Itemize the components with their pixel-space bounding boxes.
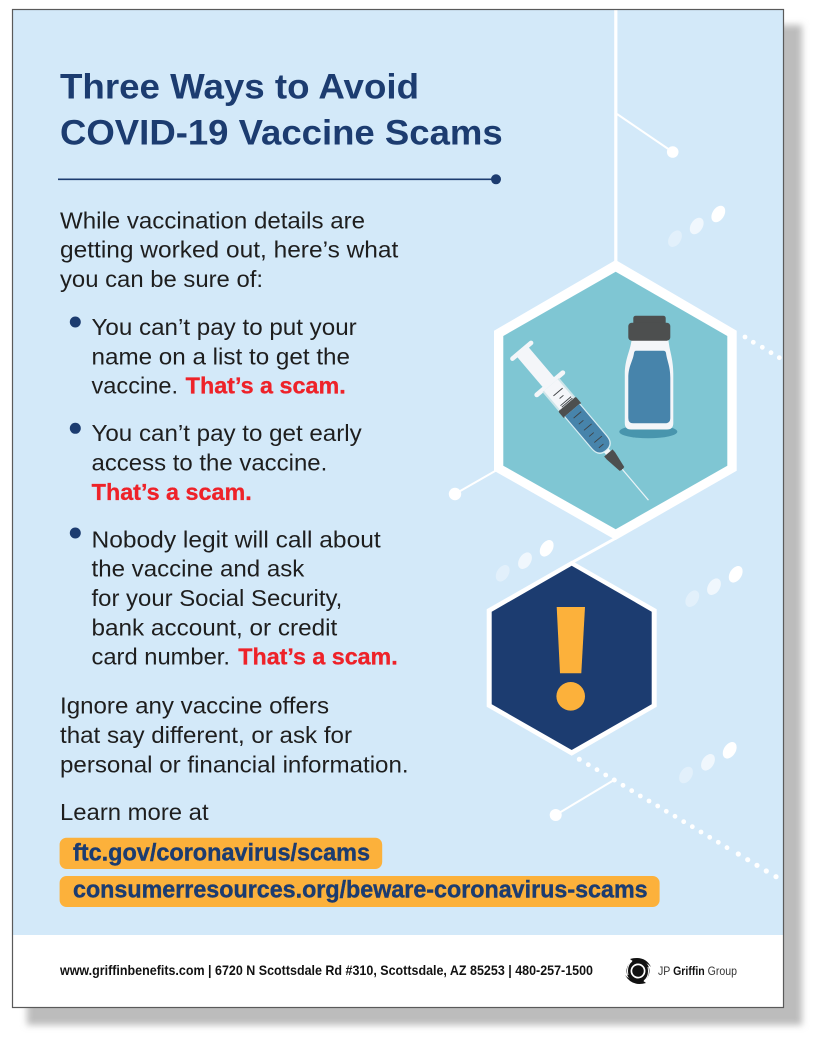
hexagon: vaccine illustration (494, 260, 737, 540)
footer logo: JP Griffin Group: JP Griffin Group (658, 964, 737, 978)
bullet 3: nobody legit will call: Nobody legit will call about (92, 526, 381, 552)
footer contact line: www.griffinbenefits.com | 6720 N Scottsdale Rd #310, Scottsdale, AZ 85253 | 480-257-1500 (59, 963, 593, 978)
bullet 2: pay for early access: access to the vaccine. (92, 449, 327, 475)
link pill: consumerresources.org: consumerresources.org/beware-coronavirus-scams (73, 876, 648, 903)
bullet 1: pay to put name on a list: name on a list to get the (92, 343, 350, 369)
icon: syringe (505, 336, 663, 513)
closing advice text (60, 692, 409, 777)
intro text (60, 207, 399, 292)
decorative network of lines and dots (449, 10, 782, 879)
footer logo: JP Griffin Group (625, 958, 737, 984)
closing advice text: personal or financial information. (60, 751, 409, 777)
icon: swirl mark (625, 958, 651, 984)
bullet 2: pay for early access: That’s a scam. (92, 479, 252, 505)
closing advice text: Ignore any vaccine offers (60, 692, 329, 718)
bullet 3: nobody legit will call: bank account, or credit (92, 614, 338, 640)
intro text: While vaccination details are (60, 207, 365, 233)
link pill: ftc.gov: ftc.gov/coronavirus/scams (73, 839, 370, 866)
title (60, 66, 503, 153)
bullet 1: pay to put name on a list: vaccine. (92, 373, 178, 399)
footer panel background (13, 935, 783, 1007)
bullet 1: pay to put name on a list: You can’t pay to put your (92, 314, 357, 340)
bullet 3: nobody legit will call: for your Social Security, (92, 585, 342, 611)
bullet 3: nobody legit will call: the vaccine and ask (92, 556, 305, 582)
icon: exclamation mark (556, 607, 585, 711)
title: Three Ways to Avoid (60, 66, 419, 106)
bullet 2: pay for early access: You can’t pay to get early (92, 420, 362, 446)
intro text: you can be sure of: (60, 266, 263, 292)
bullet 3: nobody legit will call: card number. (92, 644, 230, 670)
intro text: getting worked out, here’s what (60, 237, 399, 263)
bullet 1: pay to put name on a list (70, 314, 357, 399)
icon: vial (619, 316, 677, 438)
learn more label: Learn more at (60, 799, 209, 825)
closing advice text: that say different, or ask for (60, 722, 352, 748)
bullet 3: nobody legit will call (70, 526, 398, 670)
title rule with end dot (58, 174, 501, 184)
title: COVID-19 Vaccine Scams (60, 113, 503, 153)
bullet 1: pay to put name on a list: That’s a scam. (186, 373, 346, 399)
bullet 2: pay for early access (70, 420, 362, 505)
hexagon: warning exclamation (487, 561, 657, 756)
bullet 3: nobody legit will call: That’s a scam. (238, 644, 398, 670)
